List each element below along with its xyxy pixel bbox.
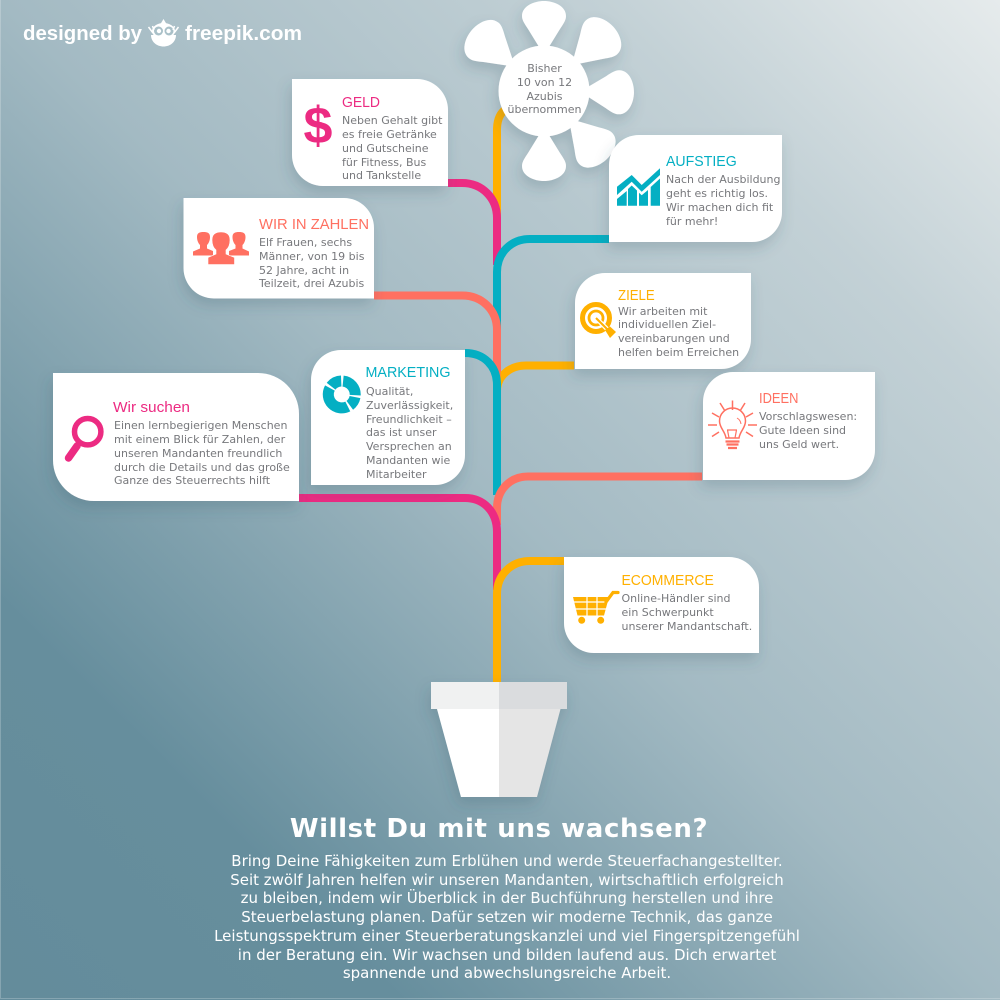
text: Mandanten wie <box>366 454 450 467</box>
text: Wir arbeiten mit <box>618 305 708 318</box>
flower <box>457 1 634 181</box>
heading: WIR IN ZAHLEN <box>259 217 369 233</box>
petal: upper right <box>556 10 629 82</box>
flower text <box>508 62 581 116</box>
text: und Tankstelle <box>342 169 421 182</box>
icon: donut chart <box>328 381 355 408</box>
flower text: Azubis <box>526 90 563 103</box>
text: unserer Mandantschaft. <box>622 620 752 633</box>
text: Vorschlagswesen: <box>759 410 857 423</box>
petal: right <box>580 70 634 115</box>
text <box>759 410 857 451</box>
text: individuellen Ziel- <box>618 318 716 331</box>
icon: rising chart <box>617 168 660 206</box>
text: Neben Gehalt gibt <box>342 114 443 127</box>
heading: AUFSTIEG <box>666 154 737 170</box>
petal: upper left <box>457 13 530 84</box>
title: Willst Du mit uns wachsen? <box>290 814 708 844</box>
heading: GELD <box>342 95 380 111</box>
panel: Ideen <box>703 372 875 480</box>
text: Teilzeit, drei Azubis <box>258 277 365 290</box>
flower centre <box>498 46 590 136</box>
text: Männer, von 19 bis <box>259 250 365 263</box>
card <box>609 135 782 242</box>
flower pot <box>431 682 567 797</box>
text <box>342 114 443 182</box>
description text: Leistungsspektrum einer Steuerberatungskanzlei und viel Fingerspitzengefühl <box>214 927 800 945</box>
text: und Gutscheine <box>342 142 429 155</box>
icon: magnifier <box>68 418 101 458</box>
text: durch die Details und das große <box>114 461 290 474</box>
description text: Seit zwölf Jahren helfen wir unseren Mandanten, wirtschaftlich erfolgreich <box>230 871 784 889</box>
text <box>258 236 365 290</box>
heading: ECOMMERCE <box>622 573 714 589</box>
icon: target <box>582 304 616 338</box>
heading: ZIELE <box>618 288 655 304</box>
text: Mitarbeiter <box>366 468 427 481</box>
description text: in der Beratung ein. Wir wachsen und bilden laufend aus. Dich erwartet <box>238 946 776 964</box>
flower text: übernommen <box>508 103 581 116</box>
text: Online-Händler sind <box>622 592 731 605</box>
petal: lower right <box>552 103 623 175</box>
icon: light bulb <box>708 400 757 448</box>
text: Nach der Ausbildung <box>666 173 780 186</box>
petal: bottom <box>522 127 566 181</box>
stem and branches <box>299 109 702 683</box>
flower text: 10 von 12 <box>517 76 572 89</box>
card <box>564 557 759 653</box>
icon: dollar: $ <box>304 97 333 155</box>
text: ein Schwerpunkt <box>622 606 714 619</box>
card <box>292 79 448 186</box>
icon: shopping cart <box>573 592 618 624</box>
heading: IDEEN <box>759 391 798 407</box>
card <box>703 372 875 480</box>
text: für mehr! <box>666 215 718 228</box>
heading: Wir suchen <box>113 400 190 416</box>
text: Einen lernbegierigen Menschen <box>114 419 287 432</box>
text: für Fitness, Bus <box>342 156 426 169</box>
flower text: Bisher <box>527 62 562 75</box>
description text: Bring Deine Fähigkeiten zum Erblühen und werde Steuerfachangestellter. <box>231 852 783 870</box>
description text: zu bleiben, indem wir Überblick in der Buchführung herstellen und ihre <box>241 888 773 907</box>
text: es freie Getränke <box>342 128 437 141</box>
text <box>618 305 739 359</box>
panel: Geld <box>292 79 448 186</box>
description text: Steuerbelastung planen. Dafür setzen wir moderne Technik, das ganze <box>241 908 773 926</box>
panel: Wir in Zahlen <box>183 198 374 298</box>
icon: people <box>193 232 249 264</box>
text: Gute Ideen sind <box>759 424 846 437</box>
card <box>53 373 299 501</box>
text: Zuverlässigkeit, <box>366 399 453 412</box>
logo: designed by freepik.com: designed by <box>23 22 143 45</box>
panel: Aufstieg <box>609 135 782 242</box>
panel: Ecommerce <box>564 557 759 653</box>
text: Versprechen an <box>366 440 452 453</box>
logo: designed by freepik.com: freepik.com <box>185 22 302 45</box>
text: Qualität, <box>366 385 413 398</box>
text: vereinbarungen und <box>618 332 730 345</box>
text <box>366 385 453 481</box>
text: 52 Jahre, acht in <box>259 264 349 277</box>
panel: Wir suchen <box>53 373 299 501</box>
panel: Ziele <box>575 273 751 369</box>
petal: top <box>522 1 566 55</box>
text <box>622 592 752 633</box>
text: Freundlichkeit – <box>366 413 452 426</box>
logo: designed by freepik.com <box>23 19 302 46</box>
description text <box>214 852 800 982</box>
card <box>575 273 751 369</box>
text: das ist unser <box>366 426 437 439</box>
icon: freepik robot <box>148 19 178 46</box>
text: helfen beim Erreichen <box>618 346 739 359</box>
text <box>114 419 290 487</box>
text: Elf Frauen, sechs <box>259 236 352 249</box>
description text: spannende und abwechslungsreiche Arbeit. <box>343 964 671 982</box>
text: Wir machen dich fit <box>666 201 774 214</box>
panel: Marketing <box>311 350 465 485</box>
text: geht es richtig los. <box>666 187 768 200</box>
text: unseren Mandanten freundlich <box>114 447 282 460</box>
heading: MARKETING <box>366 365 450 381</box>
card <box>183 198 374 298</box>
text: uns Geld wert. <box>759 438 839 451</box>
text <box>666 173 780 228</box>
text: Ganze des Steuerrechts hilft <box>114 474 271 487</box>
card <box>311 350 465 485</box>
text: mit einem Blick für Zahlen, der <box>114 433 286 446</box>
